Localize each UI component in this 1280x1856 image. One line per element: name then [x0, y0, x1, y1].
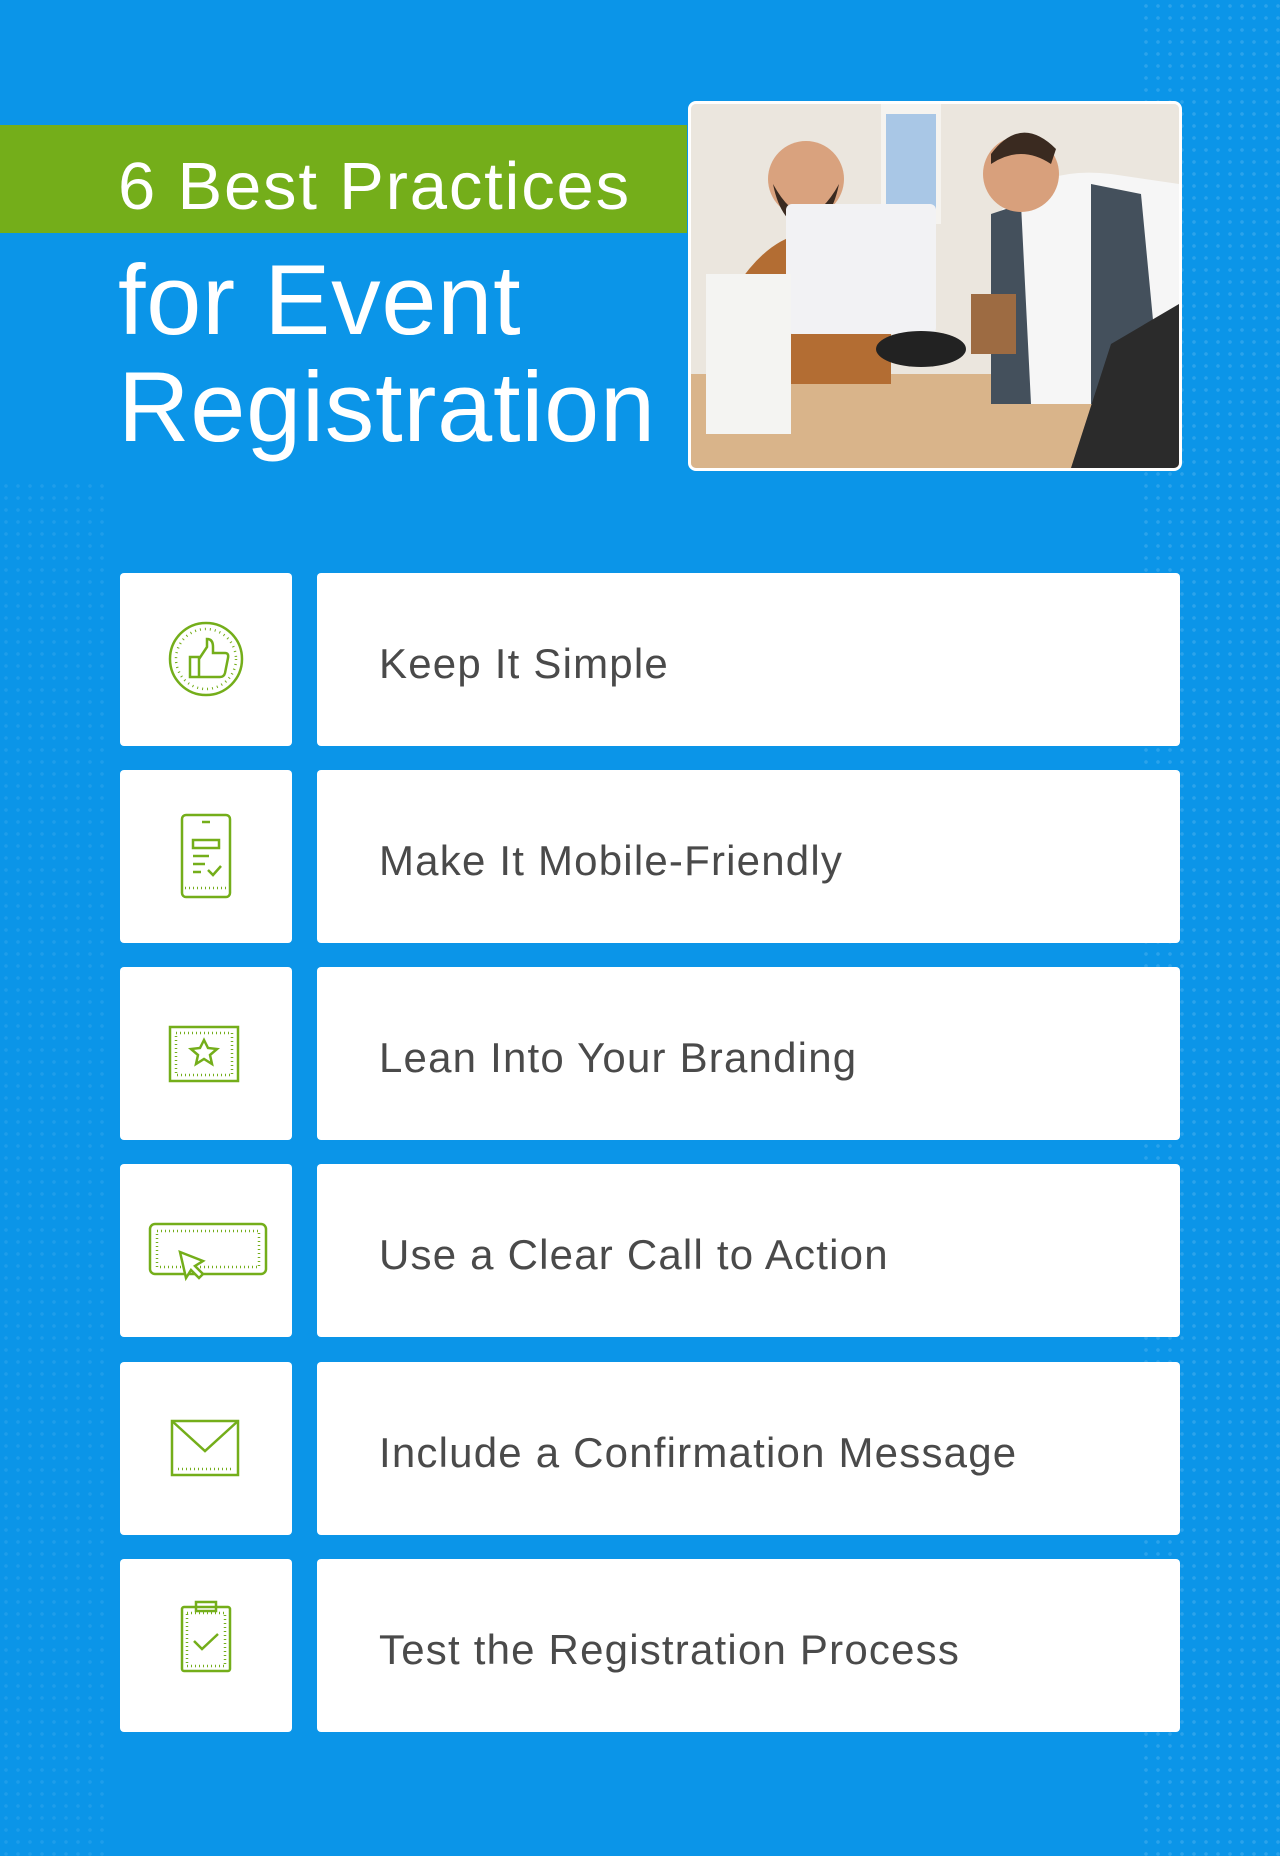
photo [688, 101, 1182, 471]
row 1 icon: thumbs up [120, 573, 292, 746]
row 3 text [317, 967, 1180, 1140]
row 3 icon: branding star [120, 967, 292, 1140]
title: Registration [118, 351, 656, 462]
title band [0, 125, 687, 233]
row 6 icon: clipboard [120, 1559, 292, 1732]
row 2 text: Make It Mobile-Friendly [379, 836, 843, 884]
row 5 text: Include a Confirmation Message [379, 1428, 1017, 1476]
row 6 text [317, 1559, 1180, 1732]
row 1 text: Keep It Simple [379, 640, 669, 686]
title: for Event [118, 244, 521, 355]
row 4 icon: CTA button [120, 1164, 292, 1337]
row 5 icon: envelope [120, 1362, 292, 1535]
row 1 text [317, 573, 1180, 746]
row 6 text: Test the Registration Process [379, 1626, 960, 1672]
row 2 icon: mobile [120, 770, 292, 943]
row 2 text [317, 770, 1180, 943]
row 3 text: Lean Into Your Branding [379, 1034, 857, 1080]
title: 6 Best Practices [118, 149, 631, 224]
row 4 text [317, 1164, 1180, 1337]
row 4 text: Use a Clear Call to Action [379, 1230, 889, 1278]
row 5 text [317, 1362, 1180, 1535]
title [118, 149, 656, 462]
